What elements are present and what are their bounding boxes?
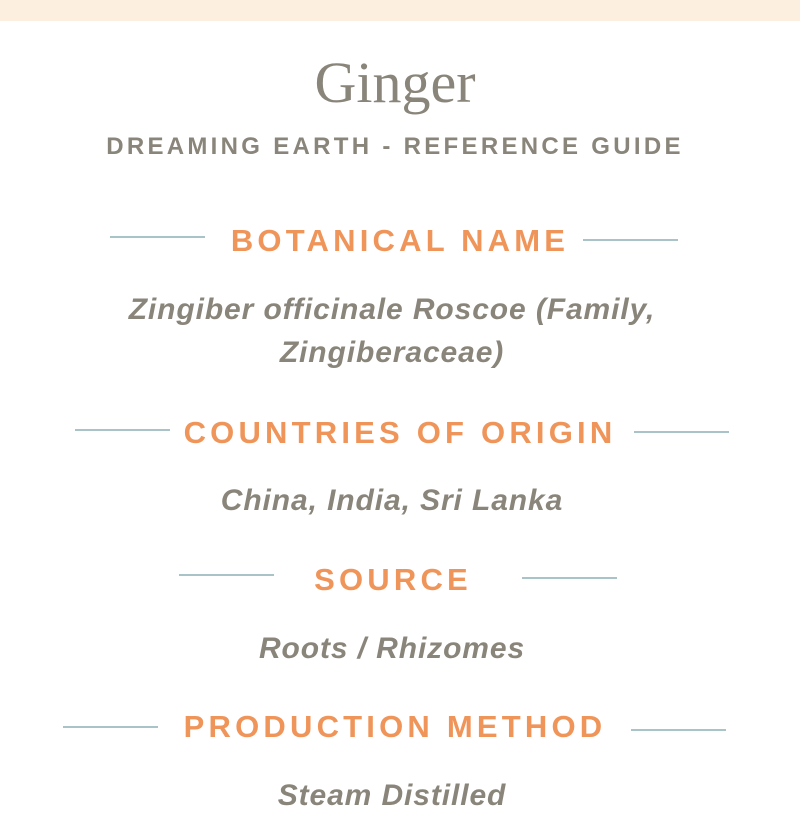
text: botanical name: Zingiber officinale Roscoe (Family, (129, 293, 655, 326)
text: countries: China, India, Sri Lanka (221, 484, 563, 517)
title: Ginger (314, 50, 476, 115)
heading: source: SOURCE (314, 562, 472, 597)
heading: production method: PRODUCTION METHOD (184, 709, 606, 744)
text: production method: Steam Distilled (278, 779, 506, 812)
text: botanical name (128, 293, 655, 369)
heading: botanical name: BOTANICAL NAME (231, 223, 569, 258)
top band (0, 0, 800, 21)
section: countries (75, 415, 729, 517)
text: source: Roots / Rhizomes (259, 632, 525, 665)
text: botanical name: Zingiberaceae) (280, 336, 504, 369)
heading: countries: COUNTRIES OF ORIGIN (184, 415, 616, 450)
subtitle: DREAMING EARTH - REFERENCE GUIDE (106, 133, 684, 160)
section: botanical name (110, 223, 678, 369)
